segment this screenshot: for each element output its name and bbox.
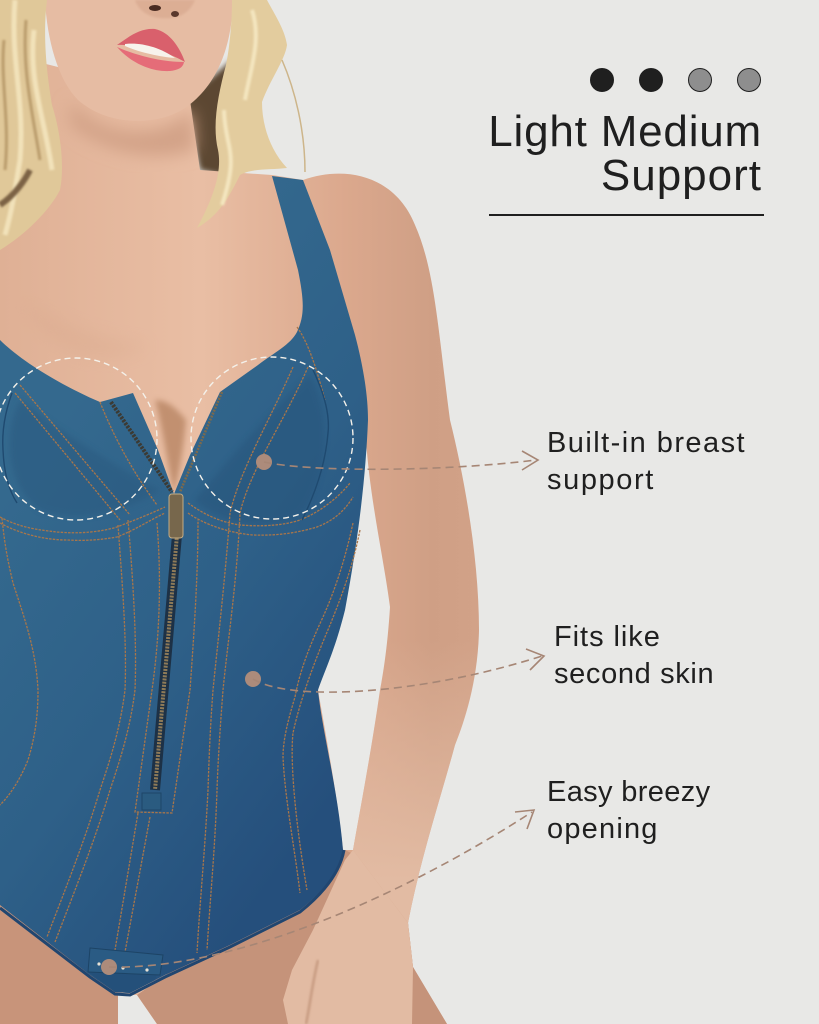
heading: Support	[601, 150, 762, 200]
left thigh	[0, 905, 118, 1024]
face	[45, 0, 233, 121]
heading: Light Medium	[488, 107, 762, 156]
callout: breast support arrow	[256, 451, 538, 470]
forearm and hand	[283, 850, 413, 1024]
chest shading	[20, 300, 150, 357]
zipper	[111, 392, 222, 810]
neck and chin shadow	[70, 100, 195, 156]
cleavage shadow	[155, 400, 186, 494]
text: easy opening: opening	[547, 812, 659, 844]
heading	[488, 107, 762, 200]
text: second skin	[554, 621, 714, 690]
contrast stitching	[0, 327, 360, 953]
text: breast support	[547, 427, 746, 496]
text: second skin: second skin	[554, 658, 714, 690]
suit shading: cups	[10, 375, 324, 523]
cup outline seams	[3, 370, 328, 520]
callout: breezy opening arrow	[101, 810, 534, 975]
dashed circle highlights	[0, 357, 353, 520]
callout: second skin arrow	[245, 649, 544, 692]
bodysuit	[0, 176, 368, 993]
skin: torso, arm and legs	[0, 60, 479, 1024]
text: easy opening: Easy breezy	[547, 776, 710, 808]
text: breast support: support	[547, 464, 655, 496]
text: easy opening	[547, 776, 710, 844]
hair: right lock	[197, 0, 305, 228]
crotch tab with hooks	[88, 948, 163, 993]
finger shadow	[306, 960, 318, 1024]
lips	[117, 29, 185, 71]
text: second skin: Fits like	[554, 621, 661, 653]
support rating dots	[590, 68, 761, 92]
text: breast support: Built-in breast	[547, 427, 746, 459]
hair: left lock	[0, 0, 62, 250]
background gap between torso and arm	[318, 440, 390, 850]
right thigh	[137, 850, 447, 1024]
suit hem	[0, 850, 344, 995]
hair underlayer by the neck	[185, 60, 240, 180]
lower arm highlight	[353, 640, 478, 923]
nose and nostrils	[135, 0, 195, 18]
